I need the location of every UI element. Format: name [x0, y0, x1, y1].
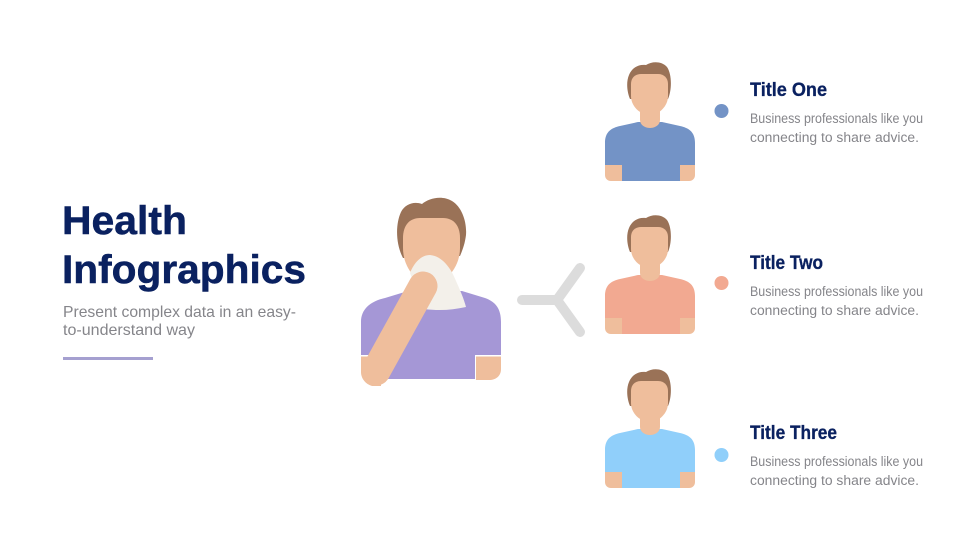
raised arm [376, 286, 423, 371]
hair [627, 215, 671, 252]
text block: title two: Business professionals like you [750, 284, 923, 299]
accent underline [63, 357, 153, 360]
title [62, 199, 306, 292]
tissue [410, 255, 466, 310]
text block: title two: connecting to share advice. [750, 303, 919, 318]
text block: title one: Title One [750, 80, 827, 101]
icon: person one [605, 62, 695, 181]
right sleeve cuff [476, 356, 501, 380]
shirt [605, 275, 695, 334]
neck [640, 108, 660, 128]
marker dot three [714, 448, 728, 462]
face [631, 381, 668, 422]
sleeve cuffs [605, 472, 695, 488]
marker dot two [714, 276, 728, 290]
shirt [361, 291, 501, 379]
text block: title one: connecting to share advice. [750, 130, 919, 145]
text block: title three: Title Three [750, 423, 837, 444]
subtitle: Present complex data in an easy- [63, 304, 296, 321]
text block: title three: connecting to share advice. [750, 473, 919, 488]
sleeve cuffs [605, 165, 695, 181]
hair [397, 198, 466, 258]
icon: person three [605, 369, 695, 488]
subtitle: to-understand way [63, 322, 195, 339]
hair [627, 62, 671, 99]
text block: title three [750, 423, 923, 488]
hair [627, 369, 671, 406]
text block: title one [750, 80, 923, 145]
text block: title one: Business professionals like you [750, 111, 923, 126]
face [631, 227, 668, 268]
neck [640, 415, 660, 435]
arrow: branching connector [522, 268, 580, 332]
neck [640, 261, 660, 281]
shirt [605, 429, 695, 488]
icon: sneezing person [361, 198, 501, 386]
face [403, 218, 460, 284]
face [631, 74, 668, 115]
left sleeve cuff [361, 356, 381, 386]
marker dot one [714, 104, 728, 118]
shirt [605, 122, 695, 181]
subtitle [63, 304, 296, 339]
text block: title two [750, 253, 923, 318]
sleeve cuffs [605, 318, 695, 334]
text block: title two: Title Two [750, 253, 823, 274]
text block: title three: Business professionals like you [750, 454, 923, 469]
icon: person two [605, 215, 695, 334]
title: Health [62, 199, 187, 243]
title: Infographics [62, 248, 306, 292]
